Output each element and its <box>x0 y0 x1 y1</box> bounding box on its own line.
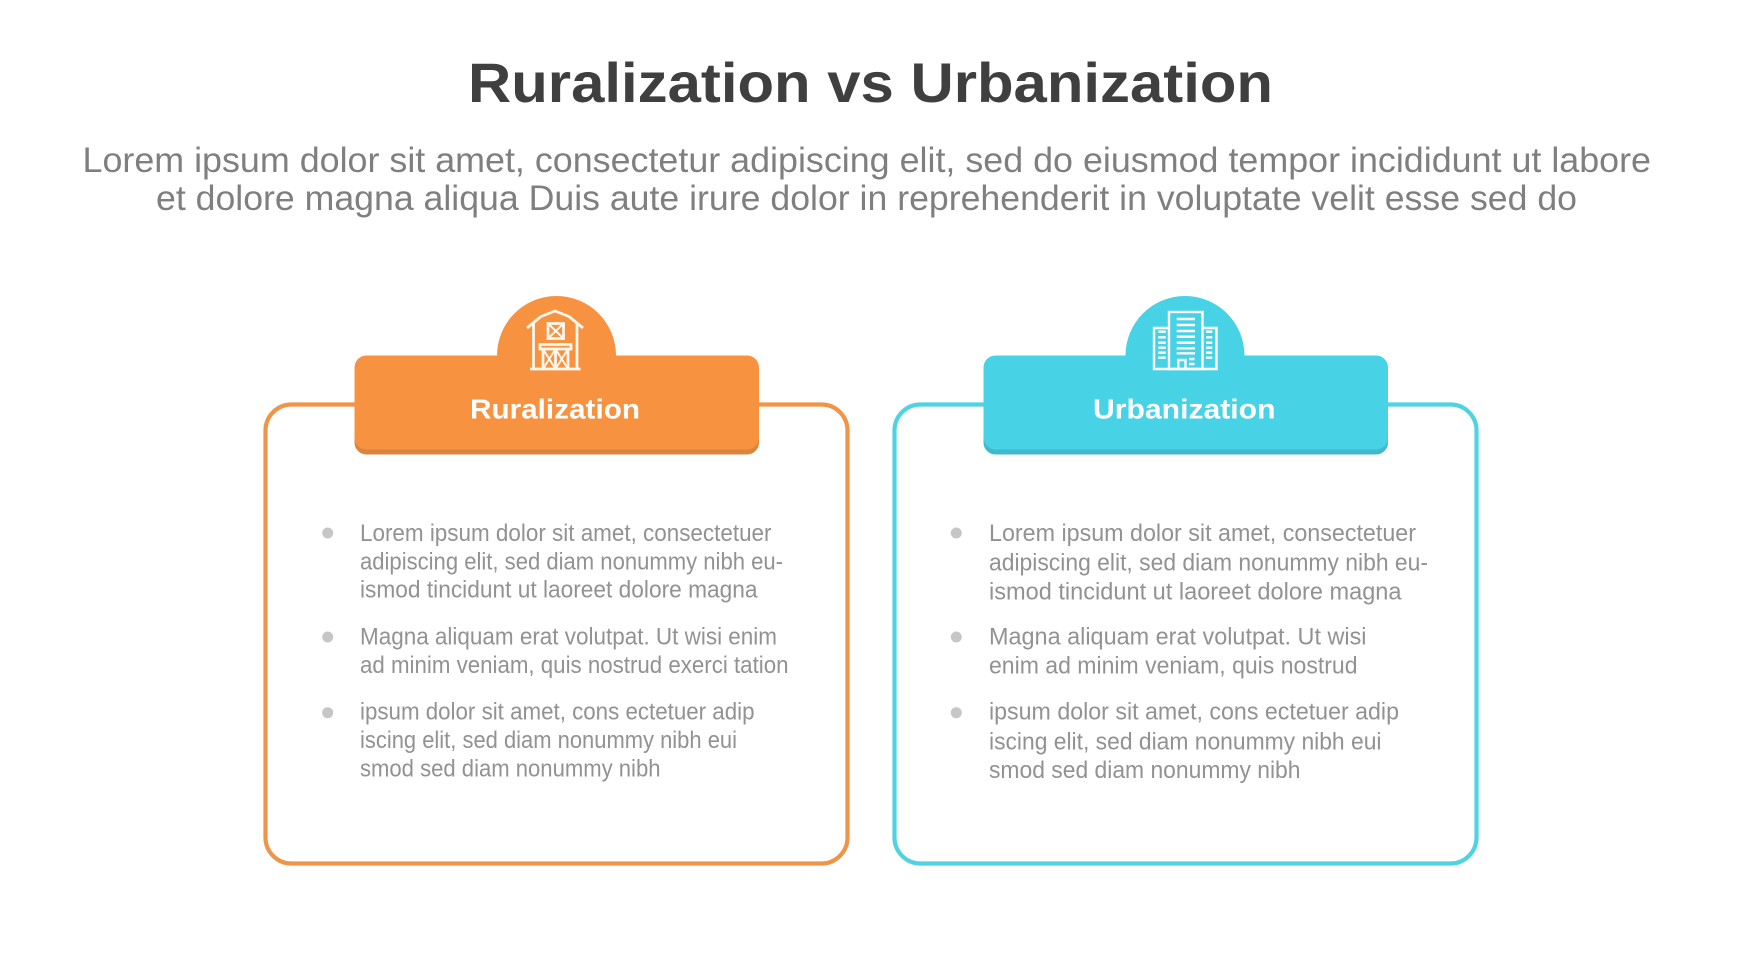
bullet list: urbanization: smod sed diam nonummy nibh <box>989 757 1300 784</box>
subtitle text <box>82 140 1651 218</box>
bullet list: urbanization: ipsum dolor sit amet, cons ectetuer adip <box>989 699 1399 726</box>
bullet list: urbanization <box>951 520 1428 784</box>
label: ruralization: Ruralization <box>470 394 640 424</box>
bullet list: urbanization: Lorem ipsum dolor sit amet, consectetuer <box>989 520 1416 547</box>
bullet list: urbanization: enim ad minim veniam, quis nostrud <box>989 652 1358 680</box>
header: ruralization <box>354 296 759 454</box>
bullet list: urbanization: iscing elit, sed diam nonummy nibh eui <box>989 728 1382 756</box>
bullet list: ruralization <box>322 520 788 782</box>
bullet list: ruralization: iscing elit, sed diam nonummy nibh eui <box>360 727 737 754</box>
panel: ruralization <box>266 296 848 864</box>
icon: city buildings <box>1154 312 1216 369</box>
bullet list: urbanization: Magna aliquam erat volutpat. Ut wisi <box>989 624 1366 651</box>
bullet list: ruralization: ad minim veniam, quis nostrud exerci tation <box>360 652 788 679</box>
icon: barn <box>527 311 583 369</box>
subtitle text: Lorem ipsum dolor sit amet, consectetur adipiscing elit, sed do eiusmod tempor incididunt ut labore <box>82 140 1651 180</box>
header: urbanization <box>984 296 1388 454</box>
bullet list: ruralization: ipsum dolor sit amet, cons ectetuer adip <box>360 699 754 726</box>
panel outline: ruralization <box>266 404 848 864</box>
bullet list: ruralization: adipiscing elit, sed diam nonummy nibh eu- <box>360 548 783 575</box>
panel outline: urbanization <box>894 404 1476 864</box>
bullet list: ruralization: Lorem ipsum dolor sit amet, consectetuer <box>360 520 772 547</box>
panel: urbanization <box>894 296 1476 864</box>
bullet list: ruralization: ismod tincidunt ut laoreet dolore magna <box>360 577 758 604</box>
subtitle text: et dolore magna aliqua Duis aute irure dolor in reprehenderit in voluptate velit esse sed do <box>156 178 1577 218</box>
bullet list: urbanization: adipiscing elit, sed diam nonummy nibh eu- <box>989 550 1428 576</box>
bullet list: urbanization: ismod tincidunt ut laoreet dolore magna <box>989 578 1402 606</box>
label: urbanization: Urbanization <box>1093 394 1276 424</box>
bullet list: ruralization: smod sed diam nonummy nibh <box>360 755 660 782</box>
title: Ruralization vs Urbanization <box>468 51 1273 114</box>
bullet list: ruralization: Magna aliquam erat volutpat. Ut wisi enim <box>360 624 777 651</box>
